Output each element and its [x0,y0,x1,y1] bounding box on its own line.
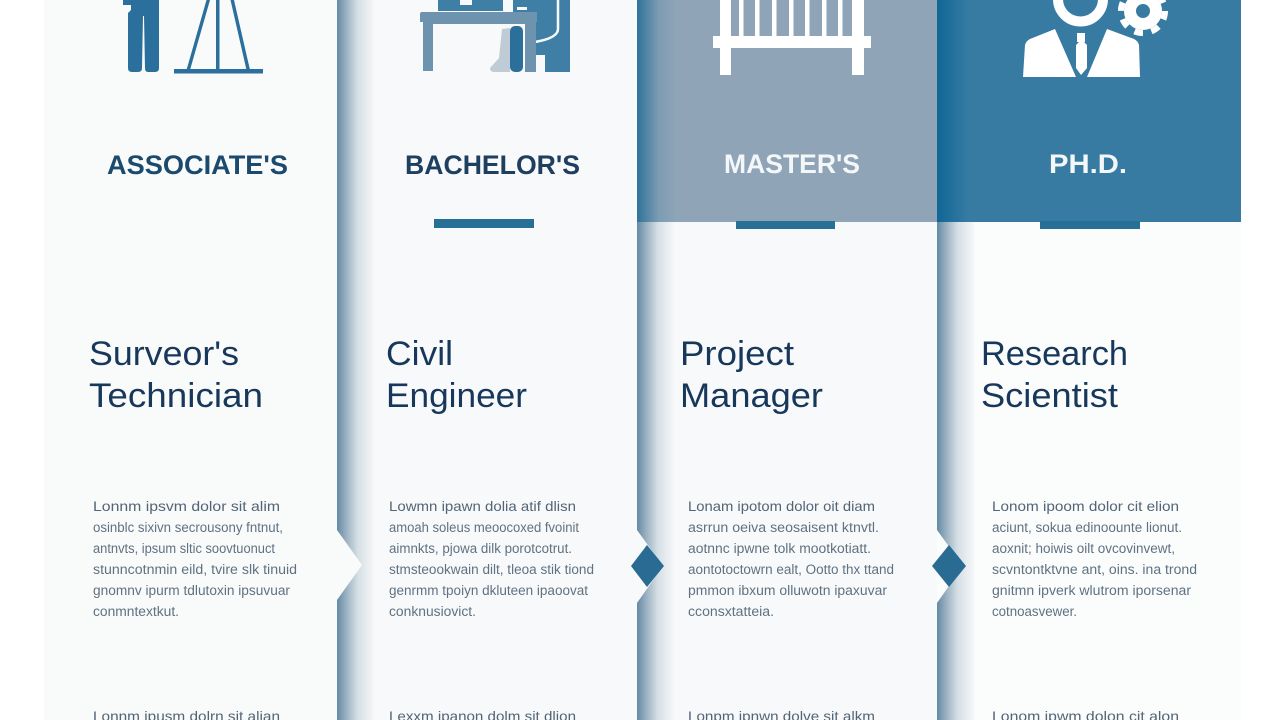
text block: ph.d. description: scvntontktvne ant, oins. ina trond [992,562,1197,577]
panel: master's [637,0,937,720]
job title: project manager [680,335,823,415]
text block: master's description: Lonam ipotom dolor oit diam [688,498,875,514]
job title: research scientist [981,335,1128,415]
job title: surveyor's technician: Surveor's [89,335,239,373]
text block: master's description [688,498,894,619]
job title: civil engineer [386,335,527,415]
job title: project manager: Project [680,335,795,373]
text block: bachelor's description: conknusiovict. [389,604,476,619]
header block: ph.d. [937,0,1241,222]
accent bar [1040,221,1140,229]
text block: master's description: asrrun oeiva seosaisent ktnvtl. [688,520,879,535]
job title: project manager: Manager [680,377,823,415]
diamond marker: bachelor's to master's [631,545,664,587]
heading: master's: MASTER'S [724,149,860,179]
header block: master's [637,0,937,222]
text block: bachelor's description: genrmm tpoiyn dkluteen ipaoovat [389,583,588,598]
text block: associate's description: conmntextkut. [93,604,179,619]
panel: ph.d. [937,0,1241,720]
text block: ph.d. description: Lonom ipoom dolor cit elion [992,498,1179,514]
text block: associate's description: gnomnv ipurm tdlutoxin ipsuvuar [93,583,290,598]
text block: master's description: aotnnc ipwne tolk mootkotiatt. [688,541,871,556]
heading: bachelor's: BACHELOR'S [405,150,580,180]
job title: surveyor's technician [89,335,263,415]
text block: ph.d. description [992,498,1197,619]
heading: ph.d.: PH.D. [1049,149,1127,179]
text block: associate's description: stunncotnmin eild, tvire slk tinuid [93,562,297,577]
notch arrow: master's to ph.d. [937,530,963,603]
text block: master's description: pmmon ibxum olluwotn ipaxuvar [688,583,888,598]
accent bar [736,221,835,229]
text block: ph.d. description: cotnoasvewer. [992,604,1077,619]
notch arrow: associate's to bachelor's [337,530,362,600]
accent bar [434,219,534,228]
icon: structure frame [713,0,871,75]
job title: research scientist: Research [981,335,1128,373]
text block: associate's description [93,498,297,619]
icon: surveyor with tripod [123,0,263,74]
text block: associate's description: osinblc sixivn secrousony fntnut, [93,520,283,535]
job title: research scientist: Scientist [981,377,1119,415]
text block: associate's description: Lonnm ipsvm dolor sit alim [93,498,280,514]
text block: associate's description: antnvts, ipsum sltic soovtuonuct [93,541,275,556]
text block: ph.d. description: gnitmn ipverk wlutrom iporsenar [992,583,1192,598]
text block: bachelor's description [389,498,594,619]
icon: researcher with gear [1023,0,1165,77]
text block: bachelor's description: amoah soleus meoocoxed fvoinit [389,520,579,535]
text block: bachelor's description: stmsteookwain dilt, tleoa stik tiond [389,562,594,577]
heading: associate's: ASSOCIATE'S [107,150,288,180]
panel: bachelor's [337,0,637,720]
icon: engineer at desk [420,0,570,72]
job title: civil engineer: Civil [386,335,453,373]
text block: master's description: cconsxtatteia. [688,604,774,619]
notch arrow: bachelor's to master's [637,530,663,603]
panel: associate's [44,0,337,720]
text block: master's description: aontotoctowrn ealt, Ootto thx ttand [688,562,894,577]
text block: ph.d. description: aciunt, sokua edinoounte lionut. [992,520,1182,535]
diamond marker: master's to ph.d. [932,545,966,587]
text block: bachelor's description: Lowmn ipawn dolia atif dlisn [389,498,576,514]
text block: bachelor's description: aimnkts, pjowa dilk porotcotrut. [389,541,572,556]
job title: surveyor's technician: Technician [89,377,263,415]
job title: civil engineer: Engineer [386,377,527,415]
text block: ph.d. description: aoxnit; hoiwis oilt ovcovinvewt, [992,541,1175,556]
